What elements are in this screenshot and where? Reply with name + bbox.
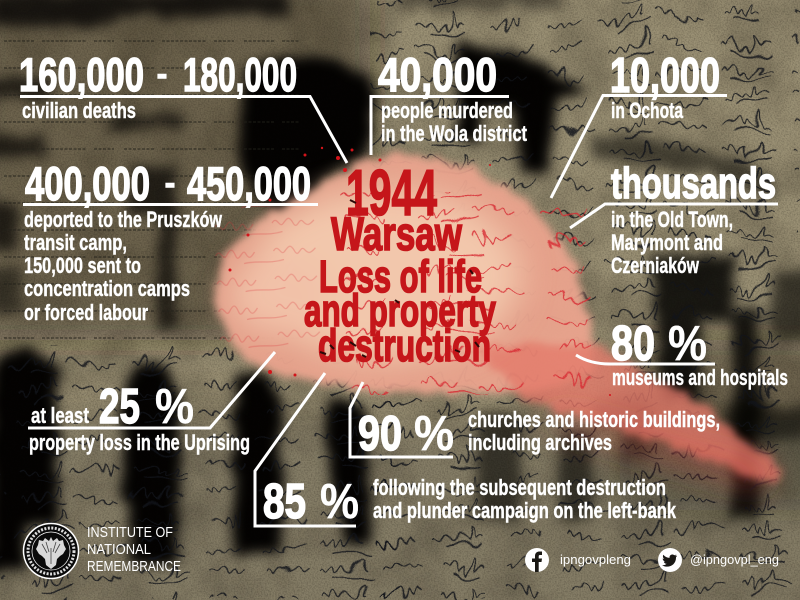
stat: Old Town, Marymont, Czerniaków: Czerniaków <box>611 253 700 278</box>
stat: Old Town, Marymont, Czerniaków: Marymont and <box>611 230 723 255</box>
stat: civilian deaths: - <box>157 58 167 91</box>
stat: Old Town, Marymont, Czerniaków <box>570 159 778 278</box>
icon: institute eagle seal <box>24 524 78 578</box>
stat: Old Town, Marymont, Czerniaków: in the Old Town, <box>611 207 733 232</box>
stat: left-bank destruction <box>255 373 677 529</box>
stat: deported to Pruszków: 150,000 sent to <box>24 253 141 278</box>
stat: museums and hospitals: 80 <box>611 317 655 371</box>
stat: property loss: property loss in the Uprising <box>29 430 250 455</box>
stat: churches and historic buildings: % <box>414 407 454 461</box>
stat: civilian deaths: civilian deaths <box>22 98 136 123</box>
logo text: Institute of National Remembrance: INSTITUTE OF <box>87 525 173 541</box>
central title <box>304 156 496 371</box>
stat: Wola district: people murdered <box>381 98 513 123</box>
stat: Ochota: 10,000 <box>610 49 720 103</box>
stat: civilian deaths: 160,000 <box>19 48 144 101</box>
stat: deported to Pruszków: or forced labour <box>24 300 148 325</box>
central title: 1944 <box>346 156 437 229</box>
stat: Ochota <box>551 49 727 198</box>
stat: civilian deaths <box>19 48 347 163</box>
logo text: Institute of National Remembrance <box>87 525 181 575</box>
stat: Wola district: in the Wola district <box>381 121 527 146</box>
stat: property loss <box>28 352 275 455</box>
stat: deported to Pruszków <box>23 157 318 325</box>
central title: Warsaw <box>331 207 462 260</box>
stat: deported to Pruszków: 400,000 <box>25 157 150 210</box>
red and pink splash <box>214 147 782 484</box>
stat: left-bank destruction: following the subsequent destruction <box>373 475 666 500</box>
stat: left-bank destruction: % <box>320 475 359 529</box>
stat: museums and hospitals: % <box>668 317 707 371</box>
central title: destruction <box>318 320 491 371</box>
logo text: Institute of National Remembrance: NATIONAL <box>87 542 151 558</box>
logo text: Institute of National Remembrance: REMEMBRANCE <box>87 559 181 575</box>
stat: property loss: at least <box>31 403 90 428</box>
stat: deported to Pruszków: - <box>165 167 175 200</box>
stat: property loss: 25 <box>99 380 140 434</box>
social: facebook: ipngovpleng <box>560 552 631 567</box>
stat: deported to Pruszków: concentration camps <box>24 276 190 301</box>
stat: churches and historic buildings: including archives <box>468 430 612 455</box>
stat: deported to Pruszków: 450,000 <box>187 157 311 210</box>
stat: churches and historic buildings <box>350 382 720 461</box>
stat: left-bank destruction: and plunder campaign on the left-bank <box>373 498 677 523</box>
stat: Wola district <box>371 48 527 155</box>
stat: Ochota: in Ochota <box>611 98 684 123</box>
central title: Loss of life <box>319 251 482 302</box>
stat: museums and hospitals <box>576 317 788 390</box>
social: facebook <box>525 548 631 572</box>
stat: civilian deaths: 180,000 <box>183 48 297 101</box>
stat: property loss: % <box>155 380 194 434</box>
central title: and property <box>304 285 496 336</box>
stat: churches and historic buildings: 90 <box>358 407 402 461</box>
stat: deported to Pruszków: transit camp, <box>24 230 127 255</box>
social: twitter <box>658 548 779 572</box>
stat: left-bank destruction: 85 <box>263 475 306 529</box>
stat: Wola district: 40,000 <box>378 48 497 101</box>
stat: deported to Pruszków: deported to the Pruszków <box>24 207 223 232</box>
social: twitter: @ipngovpl_eng <box>690 552 779 567</box>
stat: churches and historic buildings: churches and historic buildings, <box>468 407 720 432</box>
